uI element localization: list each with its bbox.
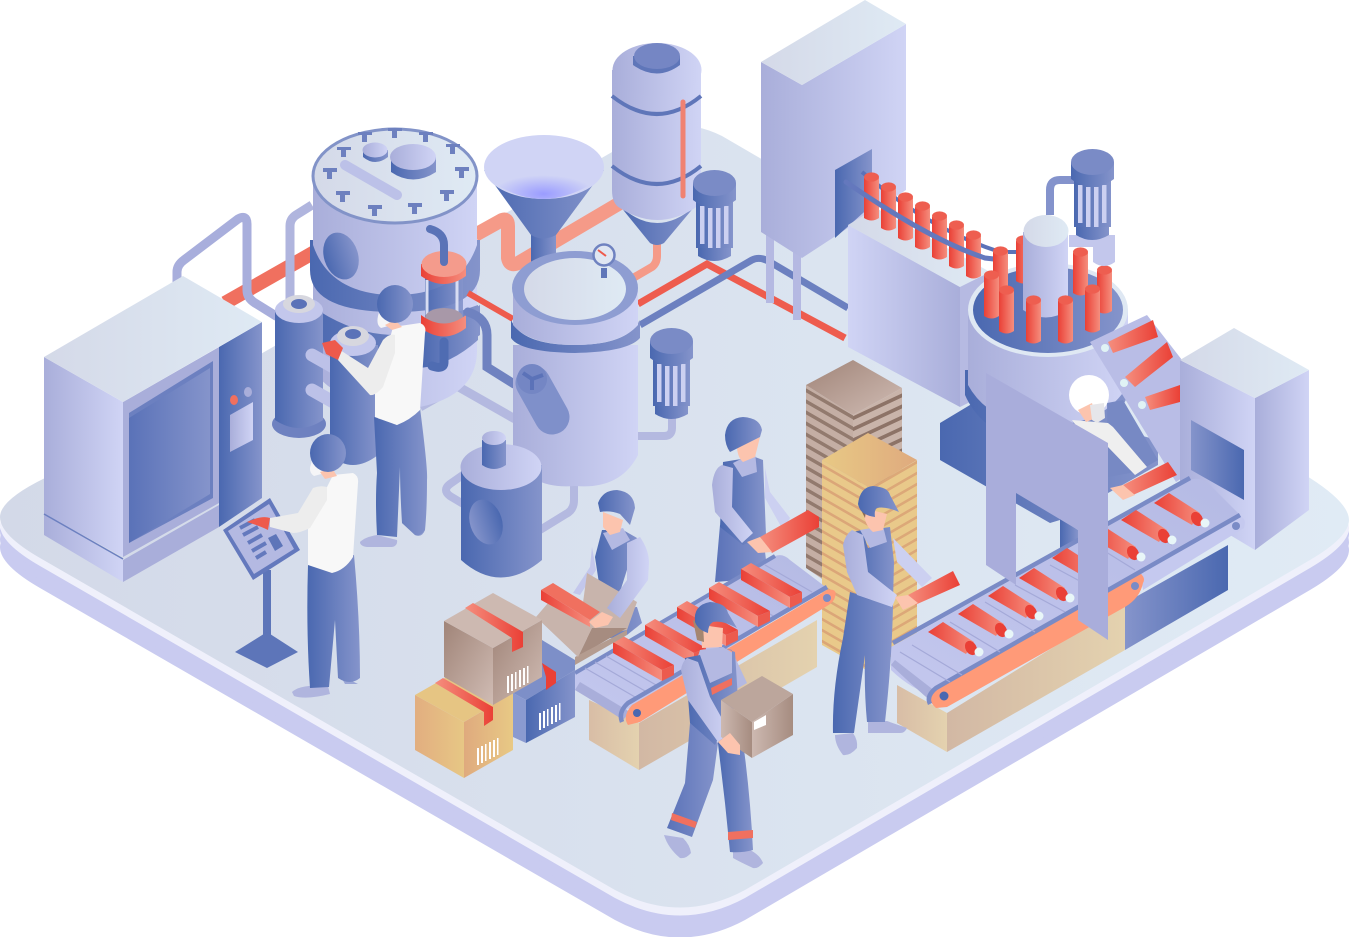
dark pipe from column bbox=[468, 312, 514, 384]
walking worker with box bbox=[664, 602, 793, 868]
large reactor tank bbox=[310, 128, 480, 407]
central tank bbox=[511, 244, 640, 486]
cardboard stack brown bbox=[806, 360, 902, 600]
right cabinet bbox=[1180, 328, 1309, 550]
conveyor one bbox=[575, 555, 836, 770]
mixer motor bbox=[1050, 180, 1075, 215]
yellow carton bbox=[415, 667, 513, 778]
mixer centre cylinder bbox=[1023, 232, 1068, 318]
worker in white coat at cylinders bbox=[322, 285, 427, 547]
arch frame bbox=[986, 373, 1108, 640]
left cylinder two bbox=[330, 326, 378, 465]
left cylinder one bbox=[272, 295, 335, 438]
filling machine box bbox=[848, 208, 990, 407]
pressure gauge bbox=[594, 244, 614, 278]
red pipe to tank bbox=[468, 293, 513, 319]
mixer kettle bbox=[965, 149, 1128, 445]
tank valve wheel bbox=[517, 364, 552, 417]
chute panel with tubes bbox=[1090, 315, 1182, 482]
cabinet control buttons bbox=[230, 387, 253, 452]
left cabinet bbox=[44, 276, 262, 582]
worker with cap at yellow stack bbox=[833, 486, 960, 755]
silo bbox=[612, 43, 702, 245]
side motor bbox=[650, 328, 693, 419]
funnel bbox=[484, 135, 604, 270]
worker at brown stack bbox=[712, 417, 790, 582]
control console bbox=[223, 498, 300, 668]
tube in hand over conveyor bbox=[1110, 462, 1177, 500]
conveyor two bbox=[891, 478, 1245, 752]
tank porthole bbox=[317, 228, 365, 284]
far arm of capped worker bbox=[893, 538, 932, 587]
worker in white coat at console bbox=[270, 434, 360, 698]
worker packing bbox=[573, 490, 642, 640]
brown carton bbox=[444, 593, 542, 705]
packing worker arm bbox=[589, 537, 649, 628]
tubes on conveyor two bbox=[928, 493, 1210, 657]
carried box bbox=[721, 676, 793, 758]
red bar in carton bbox=[541, 583, 600, 627]
lid hatches and bolts bbox=[323, 128, 469, 216]
open carton front flap bbox=[536, 603, 592, 657]
small tank bbox=[460, 431, 542, 578]
red tubes rack bbox=[846, 172, 1020, 278]
red bar and hand of worker at brown stack bbox=[747, 510, 819, 553]
motor behind silo bbox=[693, 170, 736, 261]
red tape on yellow carton bbox=[435, 678, 493, 726]
cardboard stack yellow bbox=[822, 433, 917, 672]
sight glass column bbox=[421, 229, 466, 367]
worker behind machine bbox=[1060, 375, 1158, 550]
open carton bbox=[575, 573, 637, 665]
back pipes bbox=[177, 203, 848, 530]
dark machine base bbox=[940, 396, 1158, 523]
blue carton bbox=[513, 640, 575, 743]
tall cabinet bbox=[761, 0, 906, 320]
